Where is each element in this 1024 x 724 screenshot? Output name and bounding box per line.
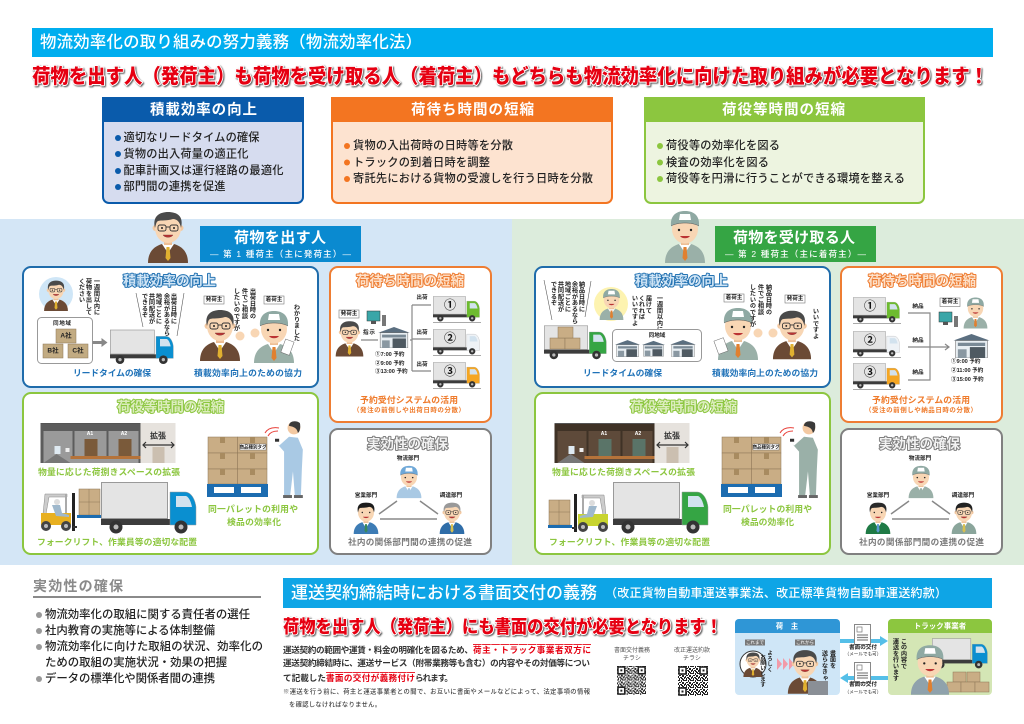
QR code: written delivery flyer: 書面交付義務: [614, 646, 650, 654]
speech: please: [759, 650, 773, 688]
panel: effectiveness list: 物流効率化の取組に関する責任者の選任: [45, 607, 250, 621]
org: sales: 営業部門: [867, 491, 890, 499]
speech: within one week: [78, 277, 100, 315]
speech: joint delivery: 地域ごとに: [564, 280, 571, 312]
caption: dispersal: （受注の前倒しや納品日時の分散）: [865, 405, 977, 414]
text block: explanation: 書面の交付が義務付け: [326, 672, 415, 683]
icon: shipper nodding: [768, 311, 811, 359]
speech: within one week: 荷物を出して: [84, 277, 92, 315]
caption: space: 物量に応じた荷捌きスペースの拡張: [552, 466, 695, 477]
panel: effectiveness list: 物流効率化に向けた取組の状況、効率化の: [45, 639, 263, 653]
icon: computer: [939, 312, 958, 327]
panel: receiver cargo handling: [535, 393, 830, 554]
delivery flow lines: [908, 313, 949, 380]
panel: receiver loading efficiency: 積載効率の向上: [635, 272, 728, 288]
box: same region companies: [38, 318, 92, 364]
icon: portrait in circle: [39, 277, 73, 311]
org: logistics: [397, 454, 421, 498]
caption: same pallet: 検品の効率化: [741, 516, 794, 527]
caption: dispersal: （発注の前倒しや出荷日時の分散）: [353, 405, 465, 414]
org: sales: 営業部門: [355, 491, 378, 499]
speech: please: お願いします: [759, 654, 766, 688]
speech: must send: 送らなきゃ: [820, 649, 828, 681]
truck 1: [433, 297, 481, 322]
org: logistics: 物流部門: [909, 454, 932, 462]
speech: consult: [232, 287, 256, 332]
truck 1: [853, 298, 901, 324]
icon: computer: [367, 311, 386, 326]
text block: explanation: 運送契約締結時に、運送サービス（附帯業務等も含む）の内容やその対価等につい: [283, 657, 590, 668]
speech: within one week: 一週間以内に: [656, 295, 663, 332]
icon: warehouse extension: A2: [121, 431, 127, 437]
icon: truck: [110, 330, 173, 364]
panel: waiting time summary: 貨物の入出荷時の日時等を分散: [353, 138, 513, 152]
QR code: written delivery flyer: [614, 646, 650, 695]
caption: same pallet: 検品の効率化: [227, 516, 281, 527]
labels: shipping: 出荷: [416, 328, 428, 336]
icon: document upper: 書面の交付: [849, 643, 877, 651]
org: procurement: 調達部門: [440, 491, 463, 499]
icon: boxes on pallet: 商品種別タグ: [752, 444, 780, 450]
icon: warehouse extension: [40, 423, 176, 463]
truck 3: [433, 363, 481, 388]
icon: shipper: [336, 321, 363, 356]
text block: explanation: 運送契約の範囲や運賃・料金の明確化を図るため、: [283, 644, 473, 655]
box: same region shops: 同地域: [649, 331, 666, 339]
icon: warehouse extension: A2: [635, 431, 641, 437]
label: shipper: 発荷主: [206, 295, 223, 303]
truck 1: ①: [864, 299, 876, 313]
panel: loading efficiency summary: 適切なリードタイムの確保: [124, 130, 260, 144]
icon: document lower: 書面の交付: [849, 680, 877, 688]
panel: shipper flow diagram: 荷 主: [776, 620, 799, 630]
note: ※運送を行う前に、荷主と運送事業者との間で、お互いに書面やメールなどによって、法定事項の情報: [283, 686, 591, 696]
label: shipper: 発荷主: [787, 294, 804, 302]
panel: cargo handling summary: 荷役等を円滑に行うことができる環境を整える: [666, 171, 905, 185]
panel: effectiveness list: 実効性の確保: [33, 578, 123, 594]
panel: shipper waiting time: [330, 267, 491, 422]
panel: shipper loading efficiency: 積載効率の向上: [123, 272, 216, 288]
icon: man with laptop: [788, 650, 828, 695]
speech: joint delivery: [136, 292, 184, 338]
reservation times: ③15:00 予約: [951, 375, 984, 383]
icon: document upper: [845, 624, 881, 656]
label: shipper: [204, 295, 224, 304]
label: receiver: [940, 297, 960, 306]
icon: pallet on fork: [77, 489, 101, 518]
speech: joint delivery: 共同配送が: [148, 292, 155, 324]
panel: waiting time summary: 寄託先における貨物の受渡しを行う日時を分散: [353, 171, 593, 185]
label: receiver: 着荷主: [726, 293, 743, 301]
heading: receiver: 荷物を受け取る人: [733, 228, 855, 246]
caption: lead time: リードタイムの確保: [73, 367, 151, 378]
text block: explanation: て記載した: [283, 672, 326, 683]
icon: scanning worker: [265, 421, 303, 498]
speech: consult: 件でご相談: [240, 287, 248, 320]
label: shipper: [785, 294, 805, 303]
caption: coordination: 社内の関係部門間の連携の促進: [859, 536, 984, 547]
icon: scanning worker: [780, 421, 818, 498]
title bar: effort obligation: 物流効率化の取り組みの努力義務（物流効率化法）: [40, 34, 422, 52]
speech: joint delivery: 出荷日時に: [170, 292, 177, 324]
panel: receiver waiting time: 荷待ち時間の短縮: [868, 272, 976, 288]
box: same region shops: [612, 330, 702, 362]
speech: this content: 運送を行います: [892, 637, 899, 683]
icon: large truck: [101, 482, 196, 534]
icon: boxes on pallet: 商品種別タグ: [240, 444, 267, 450]
panel: cargo handling summary: 荷役等時間の短縮: [722, 100, 845, 118]
arrows: coordination: [379, 501, 438, 519]
reservation times: ③13:00 予約: [375, 367, 408, 375]
panel: shipper effectiveness: [330, 429, 491, 554]
icon: warehouse extension: 拡張: [664, 430, 680, 440]
labels: delivery: 納品: [912, 302, 924, 310]
speech: within one week: [630, 295, 663, 332]
panel: shipper waiting time: 荷待ち時間の短縮: [356, 272, 464, 288]
caption: same pallet: 同一パレットの利用や: [208, 503, 298, 514]
chevrons: [777, 658, 794, 670]
heading: shipper: 荷物を出す人: [234, 228, 326, 246]
caption: cooperation: 積載効率向上のための協力: [712, 367, 818, 378]
caption: reservation system: 予約受付システムの活用: [872, 394, 970, 405]
panel: receiver loading efficiency: [535, 267, 830, 387]
labels: shipping: 出荷: [416, 293, 428, 301]
reservation times: ②11:00 予約: [951, 366, 984, 374]
speech: within one week: いいですよ: [630, 295, 638, 326]
text block: explanation: られます。: [415, 673, 453, 683]
caption: coordination: 社内の関係部門間の連携の促進: [348, 536, 472, 547]
panel: receiver background: [512, 219, 1024, 565]
panel: cargo handling summary: 荷役等の効率化を図る: [666, 138, 780, 152]
org: logistics: 物流部門: [397, 454, 420, 462]
org: procurement: 調達部門: [952, 491, 975, 499]
panel: loading efficiency summary: 積載効率の向上: [150, 100, 257, 118]
speech: consult: 件でご相談: [756, 283, 764, 316]
speech: joint delivery: 余裕があるなら: [570, 280, 578, 326]
icon: shipper talking: [200, 310, 244, 361]
speech: joint delivery: 共同配送が: [556, 280, 564, 312]
red headline: written documents: 荷物を出す人（発荷主）にも書面の交付が必要となります！: [283, 616, 722, 637]
title bar: written contract obligation: [283, 578, 992, 608]
speech: consult: したいのですが: [748, 284, 756, 328]
label: shipper: 発荷主: [341, 309, 358, 317]
panel: loading efficiency summary: 配車計画又は運行経路の最適化: [124, 163, 284, 177]
icon: document upper: （メールでも可）: [845, 652, 881, 656]
label: receiver: [264, 295, 284, 304]
text block: explanation: [283, 644, 591, 683]
panel: waiting time summary: [331, 97, 613, 203]
speech: understood: わかりました: [292, 304, 300, 341]
speech: within one week: 届けて: [644, 295, 652, 314]
icon: truck: [932, 639, 987, 668]
panel: shipper flow diagram: [735, 619, 840, 695]
icon: truck with boxes: [544, 326, 606, 359]
speech: this content: [892, 637, 907, 683]
icon: worker: [911, 645, 949, 695]
icon: receiver person: [665, 211, 705, 263]
panel: receiver cargo handling: 荷役等時間の短縮: [630, 398, 737, 414]
speech: joint delivery: [544, 280, 591, 326]
panel: waiting time summary: 荷待ち時間の短縮: [411, 100, 534, 118]
heading: receiver: [715, 226, 876, 262]
caption: same pallet: [723, 503, 812, 527]
org: sales: [866, 491, 890, 534]
label: receiver: [724, 293, 744, 302]
truck 2: ②: [864, 333, 876, 347]
box: same region companies: 同地域: [53, 319, 71, 327]
reservation times: [375, 350, 408, 375]
icon: worker talking: [714, 308, 762, 360]
title bar: written contract obligation: 運送契約締結時における書面交付の義務: [291, 584, 597, 602]
box: same region companies: C社: [72, 346, 84, 354]
icon: pallet on fork: [548, 500, 572, 528]
speech: please: よろしく: [766, 650, 773, 672]
org: sales: [354, 491, 378, 534]
reservation times: [951, 357, 984, 383]
panel: carrier diagram: トラック事業者: [914, 620, 967, 630]
icon: warehouse: [954, 334, 990, 358]
panel: cargo handling summary: 検査の効率化を図る: [666, 155, 769, 169]
panel: loading efficiency summary: 貨物の出入荷量の適正化: [124, 146, 248, 160]
speech: must send: 書面を: [828, 649, 836, 669]
speech: within one week: 一週間以内に: [92, 278, 100, 315]
speech: joint delivery: できるぞ: [140, 293, 148, 319]
icon: large truck: [613, 482, 708, 534]
icon: boxes: [947, 672, 989, 692]
label: before: これまで: [746, 640, 764, 646]
arrows: coordination: [891, 501, 950, 519]
panel: waiting time summary: トラックの到着日時を調整: [353, 155, 490, 169]
panel: effectiveness list: 社内教育の実施等による体制整備: [45, 623, 215, 637]
icon: warehouse: [378, 327, 410, 348]
icon: warehouse extension: A1: [87, 431, 93, 437]
label: shipper: [339, 309, 359, 318]
caption: same pallet: 同一パレットの利用や: [723, 503, 812, 514]
truck 1: ①: [444, 298, 456, 312]
icon: warehouse extension: A1: [601, 431, 607, 437]
reservation times: ①9:00 予約: [951, 357, 981, 365]
panel: carrier diagram: [888, 619, 992, 695]
caption: reservation system: 予約受付システムの活用: [360, 394, 458, 405]
org: procurement: [952, 491, 976, 534]
arrow: doc to shipper: [840, 673, 888, 683]
note: [283, 686, 591, 708]
title bar: written contract obligation: （改正貨物自動車運送事業法、改正標準貨物自動車運送約款）: [605, 585, 947, 600]
icon: warehouse extension: 拡張: [150, 430, 166, 440]
truck 2: [433, 330, 481, 356]
panel: effectiveness list: データの標準化や関係者間の連携: [45, 671, 215, 685]
box: same region companies: B社: [47, 346, 59, 354]
panel: shipper cargo handling: 荷役等時間の短縮: [117, 398, 224, 414]
label: receiver: 着荷主: [942, 297, 959, 305]
QR code: revised terms flyer: 改正運送約款: [674, 646, 710, 654]
label: from now: これから: [796, 639, 814, 646]
heading: shipper: — 第 1 種荷主（主に発荷主）—: [210, 249, 352, 259]
icon: shipper person: [148, 212, 188, 263]
QR code: written delivery flyer: チラシ: [623, 655, 641, 662]
labels: shipping: 出荷: [416, 360, 428, 368]
speech: consult: したいのですが: [232, 288, 240, 332]
icon: forklift: [572, 494, 608, 532]
panel: receiver effectiveness: [841, 429, 1002, 554]
speech: within one week: くれれば: [638, 295, 645, 321]
heading: shipper: [200, 226, 361, 262]
speech: within one week: ください: [78, 278, 85, 303]
speech: joint delivery: できるぞ: [550, 281, 557, 307]
arrow: doc to carrier: [840, 636, 888, 646]
QR code: revised terms flyer: チラシ: [683, 655, 701, 662]
icon: document lower: [845, 662, 881, 694]
QR code: revised terms flyer: [674, 646, 710, 696]
speech: consult: [748, 283, 772, 328]
speech: must send: [820, 649, 836, 681]
panel: effectiveness list: ための取組の実施状況・効果の把握: [45, 655, 227, 669]
speech: consult: 納品日時の: [764, 283, 772, 315]
labels: delivery: 納品: [912, 336, 924, 344]
panel: shipper background: [0, 219, 512, 565]
icon: boxes on pallet: [721, 437, 782, 497]
labels: delivery: 納品: [912, 368, 924, 376]
label: receiver: 着荷主: [266, 295, 283, 303]
icon: portrait in circle: [594, 287, 628, 321]
note: を確認しなければなりません。: [289, 700, 381, 708]
box: same region companies: A社: [60, 330, 72, 340]
icon: worker with clipboard: [250, 311, 294, 363]
speech: consult: 出荷日時の: [248, 287, 256, 319]
panel: cargo handling summary: [644, 97, 925, 203]
panel: receiver waiting time: [841, 267, 1002, 422]
org: logistics: [909, 454, 933, 498]
reservation times: ②9:00 予約: [375, 359, 405, 367]
heading: receiver: — 第 2 種荷主（主に着荷主）—: [725, 249, 866, 259]
truck 3: ③: [444, 364, 456, 378]
caption: space: 物量に応じた荷捌きスペースの拡張: [38, 466, 180, 477]
labels: delivery: [912, 302, 924, 376]
speech: joint delivery: 地域ごとに: [154, 292, 162, 324]
reservation times: ①7:00 予約: [375, 350, 405, 358]
panel: receiver effectiveness: 実効性の確保: [879, 436, 961, 452]
shipping flow lines: [361, 305, 431, 371]
icon: warehouse extension: [554, 423, 690, 463]
truck 3: ③: [864, 365, 876, 379]
text block: explanation: 荷主・トラック事業者双方に: [473, 644, 591, 655]
icon: forklift: [41, 493, 77, 531]
icon: document lower: （メールでも可）: [845, 690, 881, 694]
caption: forklift: フォークリフト、作業員等の適切な配置: [37, 536, 197, 547]
speech: joint delivery: 納品日時に: [578, 280, 585, 312]
speech: joint delivery: 余裕があるなら: [162, 292, 170, 338]
text: instruction: 指示: [363, 328, 375, 336]
icon: boxes on pallet: [207, 437, 268, 497]
truck 2: [853, 332, 901, 358]
caption: cooperation: 積載効率向上のための協力: [194, 367, 302, 378]
panel: shipper loading efficiency: [23, 267, 318, 387]
arrow: to truck: [92, 338, 108, 347]
speech: this content: この内容で: [900, 638, 907, 669]
truck 2: ②: [444, 331, 456, 345]
caption: forklift: フォークリフト、作業員等の適切な配置: [549, 536, 710, 547]
title bar: effort obligation: [32, 28, 993, 57]
panel: shipper cargo handling: [23, 393, 318, 554]
truck 3: [853, 364, 901, 390]
caption: lead time: リードタイムの確保: [583, 367, 662, 378]
icon: phone portrait: [740, 651, 766, 677]
org: procurement: [440, 491, 464, 534]
speech: okay: いいですよ: [812, 308, 819, 339]
caption: same pallet: [208, 503, 298, 527]
panel: loading efficiency summary: [102, 97, 304, 203]
panel: shipper effectiveness: 実効性の確保: [367, 436, 449, 452]
icon: receiver worker: [964, 298, 987, 328]
labels: shipping: [416, 293, 428, 368]
panel: loading efficiency summary: 部門間の連携を促進: [124, 179, 226, 193]
panel: effectiveness list: [33, 578, 263, 685]
